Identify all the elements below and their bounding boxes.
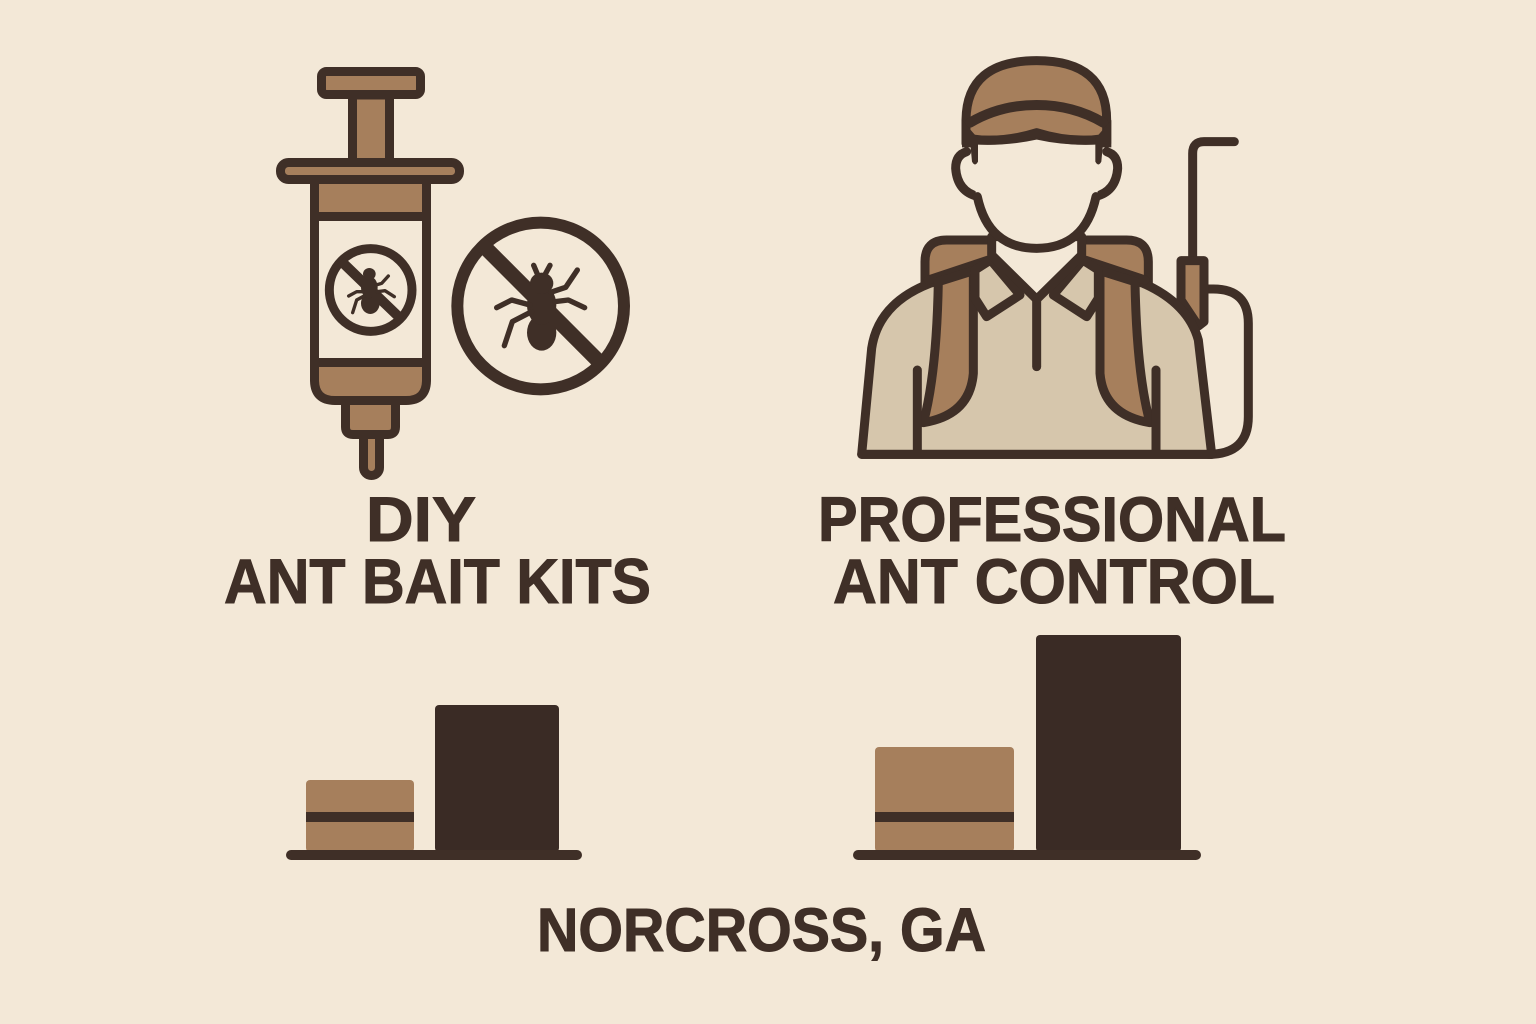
torso: [862, 270, 1212, 454]
ears: [956, 152, 978, 197]
backpack top: [925, 240, 1148, 307]
neck opening: [992, 237, 1082, 299]
right strap: [1100, 271, 1150, 423]
left strap: [923, 271, 973, 423]
cap side tabs: [962, 120, 1111, 164]
heading: DIY ant bait kits: [224, 485, 651, 617]
sprayer hose: [1205, 289, 1248, 454]
icon: pest control technician with sprayer: [862, 61, 1248, 454]
location label: NORCROSS, GA: [537, 896, 986, 964]
face: [975, 140, 1098, 248]
icon: large no-ant prohibition sign: [457, 223, 624, 389]
collar: [975, 260, 1020, 317]
sprayer wand: [1193, 142, 1234, 260]
bar chart: professional cost comparison: [853, 635, 1201, 860]
bar chart: DIY cost comparison: [286, 705, 582, 860]
heading: DIY ant bait kits: DIY: [366, 485, 476, 555]
arm lines: [862, 370, 1212, 454]
sprayer handle: [1181, 261, 1204, 326]
heading: DIY ant bait kits: ANT BAIT KITS: [224, 547, 651, 617]
cap: [966, 61, 1107, 143]
heading: professional ant control: ANT CONTROL: [833, 547, 1275, 617]
heading: professional ant control: PROFESSIONAL: [818, 485, 1286, 555]
icon: small no-ant sign on syringe label: [329, 249, 412, 331]
backpack lower edge: [928, 260, 1145, 280]
icon: syringe with ant bait label: [280, 72, 460, 476]
placket: [1023, 302, 1050, 367]
heading: professional ant control: [818, 485, 1286, 617]
